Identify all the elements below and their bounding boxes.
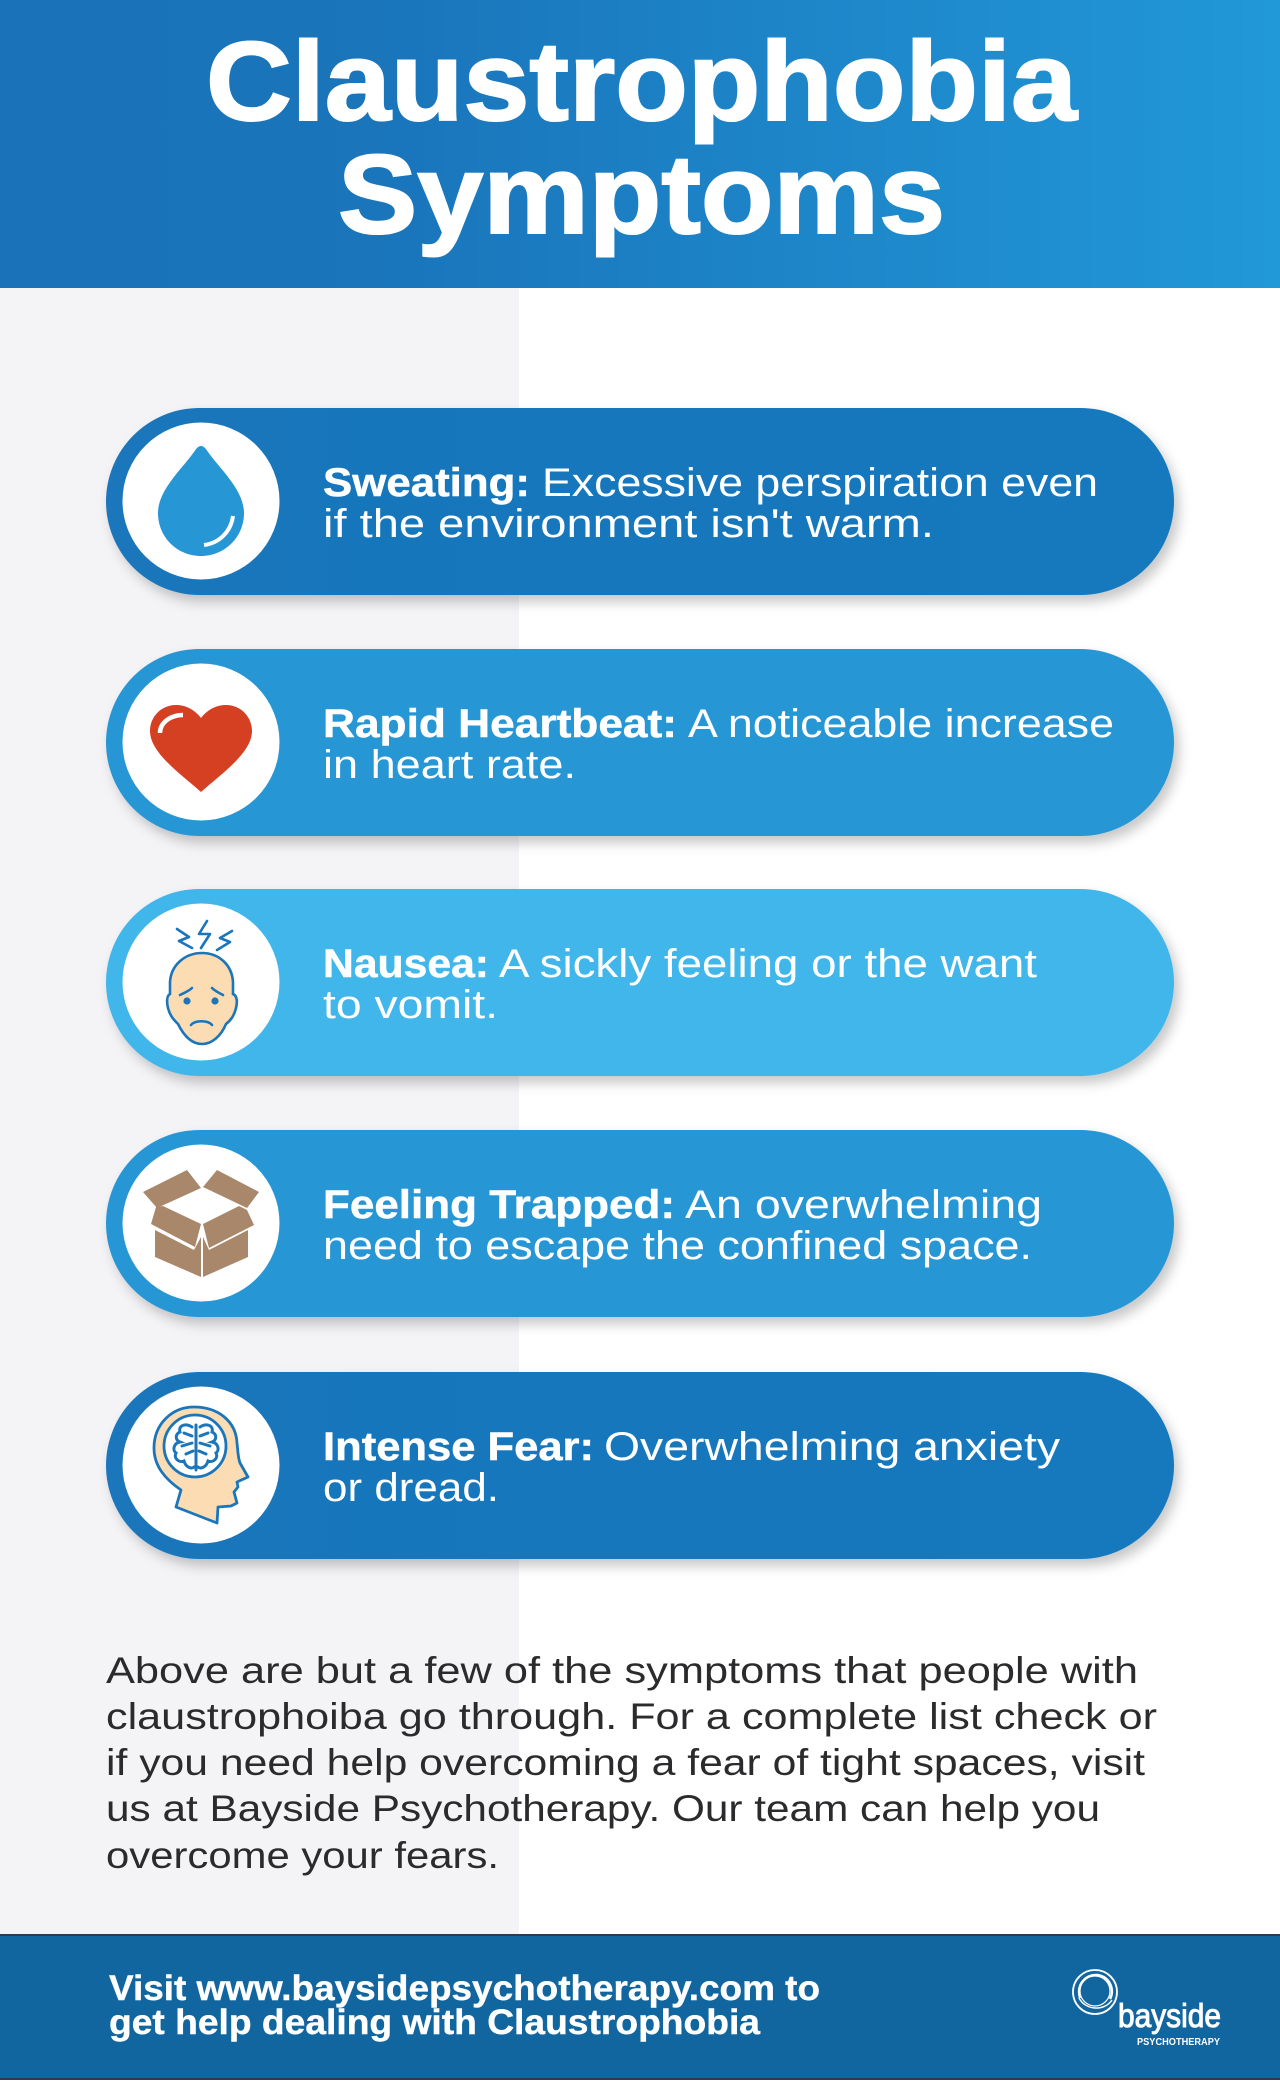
logo: bayside psychotherapy: PSYCHOTHERAPY — [1137, 2037, 1220, 2048]
panel: nausea — [106, 889, 1174, 1076]
text: sweating — [323, 461, 1098, 546]
text: sweating: if the environment isn't warm. — [323, 502, 934, 546]
text: feeling trapped: need to escape the confined space. — [323, 1224, 1032, 1268]
closing paragraph: claustrophoiba go through. For a complete list check or — [106, 1696, 1157, 1737]
footer call to action: get help dealing with Claustrophobia — [109, 2003, 761, 2042]
title: Symptoms — [338, 132, 945, 257]
footer call to action — [109, 1969, 820, 2042]
text: rapid heartbeat: Rapid Heartbeat: — [323, 702, 677, 746]
text: nausea: Nausea: — [323, 942, 489, 986]
text: intense fear: or dread. — [323, 1466, 499, 1510]
text: intense fear — [323, 1425, 1060, 1510]
footer band — [0, 1934, 1280, 2080]
title: Claustrophobia — [206, 19, 1078, 144]
panel: intense fear — [106, 1372, 1174, 1559]
text: rapid heartbeat: A noticeable increase — [688, 702, 1114, 746]
footer call to action: Visit www.baysidepsychotherapy.com to — [109, 1969, 820, 2008]
text: intense fear: Overwhelming anxiety — [604, 1425, 1060, 1469]
closing paragraph — [106, 1650, 1157, 1876]
text: feeling trapped: An overwhelming — [685, 1183, 1042, 1227]
icon: open box — [143, 1170, 259, 1277]
text: feeling trapped: Feeling Trapped: — [323, 1183, 675, 1227]
title — [206, 19, 1078, 257]
icon: water drop — [158, 446, 244, 556]
text: nausea: to vomit. — [323, 983, 498, 1027]
icon: head with brain — [154, 1407, 248, 1523]
icon: heart — [150, 705, 252, 792]
text: rapid heartbeat — [323, 702, 1114, 787]
panel: feeling trapped — [106, 1130, 1174, 1317]
header band — [0, 0, 1280, 288]
text: sweating: Sweating: — [323, 461, 530, 505]
text: sweating: Excessive perspiration even — [542, 461, 1098, 505]
text: rapid heartbeat: in heart rate. — [323, 743, 576, 787]
panel: rapid heartbeat — [106, 649, 1174, 836]
background side panel — [0, 288, 519, 1934]
text: nausea: A sickly feeling or the want — [499, 942, 1037, 986]
closing paragraph: us at Bayside Psychotherapy. Our team can help you — [106, 1788, 1100, 1829]
logo: bayside psychotherapy: bayside — [1118, 1997, 1221, 2034]
closing paragraph: Above are but a few of the symptoms that people with — [106, 1650, 1138, 1691]
text: nausea — [323, 942, 1037, 1027]
closing paragraph: if you need help overcoming a fear of tight spaces, visit — [106, 1742, 1146, 1783]
closing paragraph: overcome your fears. — [106, 1835, 499, 1876]
text: feeling trapped — [323, 1183, 1042, 1268]
text: intense fear: Intense Fear: — [323, 1425, 594, 1469]
panel: sweating — [106, 408, 1174, 595]
icon: sick face — [167, 921, 237, 1044]
logo: bayside psychotherapy — [1073, 1970, 1221, 2048]
